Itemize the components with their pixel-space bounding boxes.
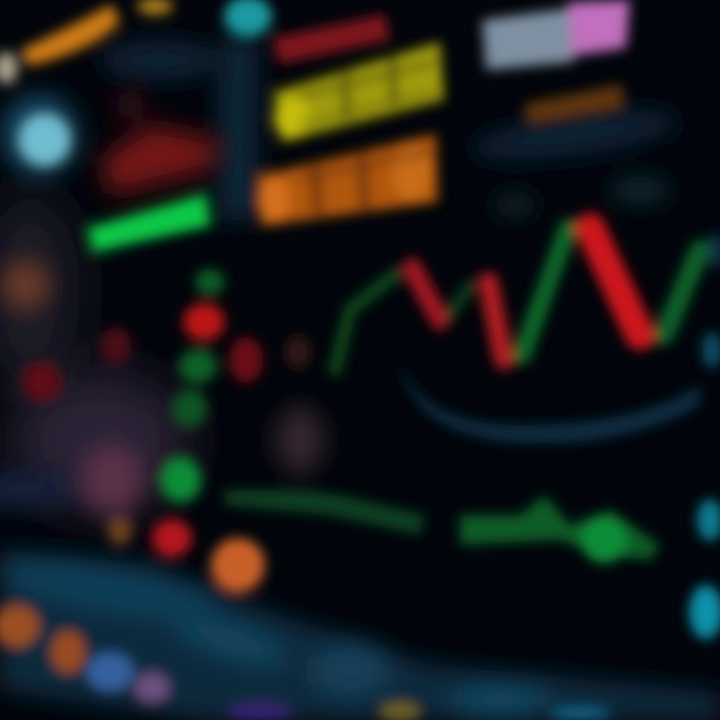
green final segment [664,250,700,335]
orange dim label [524,84,624,124]
red bar top [272,14,390,64]
bottom left coloured chips [0,605,610,720]
orange panel [258,134,438,226]
red falling segment [412,268,440,320]
orange glow bottom [211,538,265,592]
light blue orb left [2,95,78,175]
green small segment [450,285,470,315]
red and green line chart [335,228,700,370]
top left orange streak [0,0,173,84]
green rising segment [335,275,395,370]
dark red block [100,93,220,195]
green bar [88,194,210,252]
bright red segment [590,228,640,335]
green lower chart [225,490,660,563]
top right pale and pink blocks [482,0,630,70]
green third segment [522,228,568,355]
yellow panel [274,42,444,142]
left muted blotches [1,261,144,516]
red second segment [488,282,504,360]
cyan dot top [224,0,272,36]
candle dots [23,269,311,557]
right edge cyan dots [689,232,720,639]
